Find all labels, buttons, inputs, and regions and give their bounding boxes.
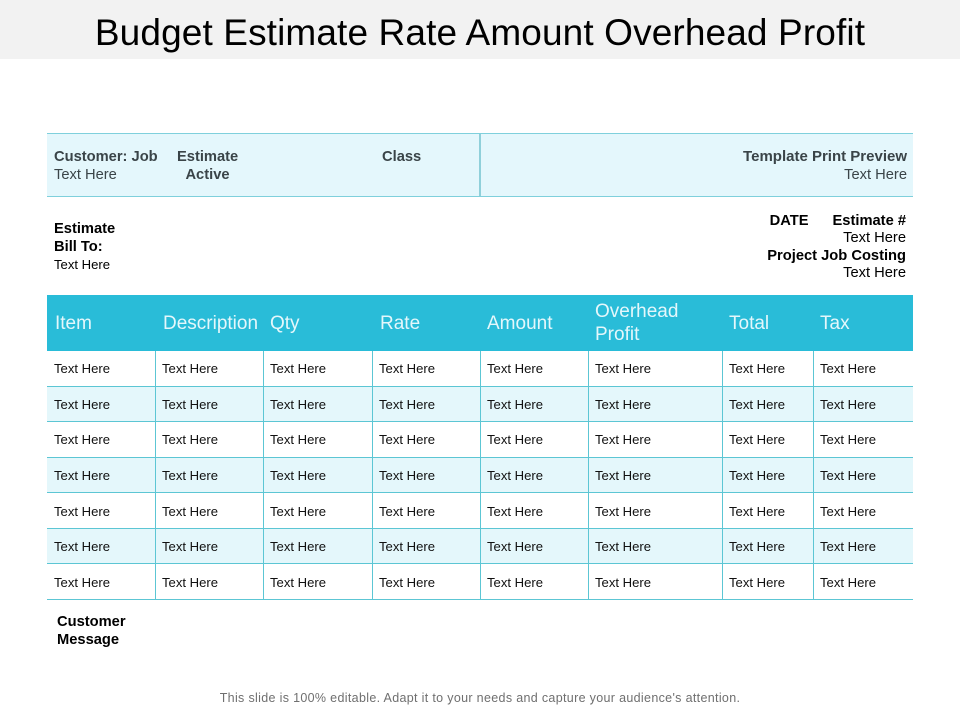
header: amount: Amount: [487, 313, 552, 334]
row 7: Text Here: [54, 575, 110, 590]
row 4: Text Here: [162, 468, 218, 483]
row 6: Text Here: [487, 539, 543, 554]
row 1: Text Here: [595, 361, 651, 376]
row 2: [47, 387, 913, 422]
title: Budget Estimate Rate Amount Overhead Profit: [95, 12, 865, 53]
row 6: Text Here: [820, 539, 876, 554]
row 3: [47, 422, 913, 458]
estimate status: Estimate: [177, 149, 238, 165]
row 4: Text Here: [379, 468, 435, 483]
row 4: Text Here: [729, 468, 785, 483]
row 5: Text Here: [729, 504, 785, 519]
row 3: Text Here: [729, 432, 785, 447]
customer job: Text Here: [54, 167, 117, 183]
row 6: Text Here: [729, 539, 785, 554]
row 7: Text Here: [595, 575, 651, 590]
row 6: [47, 529, 913, 564]
row 3: Text Here: [820, 432, 876, 447]
row 4: Text Here: [54, 468, 110, 483]
template print preview: [743, 148, 907, 183]
table: estimate line items: [47, 295, 913, 600]
row 1: Text Here: [379, 361, 435, 376]
row 4: Text Here: [820, 468, 876, 483]
header: overhead profit: Overhead: [595, 301, 678, 322]
row 1: Text Here: [54, 361, 110, 376]
estimate bill to: [54, 221, 115, 272]
footer note: This slide is 100% editable. Adapt it to your needs and capture your audience's attention.: [220, 691, 740, 705]
row 2: Text Here: [270, 397, 326, 412]
row 5: Text Here: [270, 504, 326, 519]
estimate bill to: Bill To:: [54, 239, 103, 255]
row 7: Text Here: [729, 575, 785, 590]
header: qty: Qty: [270, 313, 300, 334]
row 1: Text Here: [487, 361, 543, 376]
row 2: Text Here: [54, 397, 110, 412]
row 6: Text Here: [379, 539, 435, 554]
date and estimate number block: Text Here: [843, 265, 906, 281]
date and estimate number block: Text Here: [843, 230, 906, 246]
row 4: Text Here: [595, 468, 651, 483]
row 2: Text Here: [487, 397, 543, 412]
estimate bill to: Estimate: [54, 221, 115, 237]
row 5: [47, 493, 913, 529]
row 5: Text Here: [162, 504, 218, 519]
row 7: [47, 564, 913, 600]
row 5: Text Here: [379, 504, 435, 519]
class label: Class: [382, 149, 421, 165]
estimate bill to: Text Here: [54, 257, 110, 272]
header: total: Total: [729, 313, 769, 334]
estimate status: [177, 149, 238, 183]
row 6: Text Here: [54, 539, 110, 554]
customer message: [57, 614, 126, 648]
row 5: Text Here: [595, 504, 651, 519]
title band: [0, 0, 960, 59]
row 1: Text Here: [162, 361, 218, 376]
customer message: Message: [57, 632, 119, 648]
date and estimate number block: [767, 212, 906, 281]
table header: [47, 295, 913, 351]
row 7: Text Here: [487, 575, 543, 590]
row 1: Text Here: [820, 361, 876, 376]
row 4: [47, 458, 913, 493]
row 3: Text Here: [162, 432, 218, 447]
row 2: Text Here: [379, 397, 435, 412]
header: tax: Tax: [820, 313, 850, 334]
row 7: Text Here: [379, 575, 435, 590]
header: overhead profit: Profit: [595, 324, 639, 345]
row 3: Text Here: [487, 432, 543, 447]
row 7: Text Here: [820, 575, 876, 590]
row 4: Text Here: [270, 468, 326, 483]
customer job: Customer: Job: [54, 149, 158, 165]
row 3: Text Here: [595, 432, 651, 447]
divider: [479, 134, 480, 196]
row 5: Text Here: [487, 504, 543, 519]
customer message: Customer: [57, 614, 126, 630]
header: overhead profit: [595, 301, 678, 345]
estimate status: Active: [185, 167, 230, 183]
row 3: Text Here: [270, 432, 326, 447]
row 2: Text Here: [162, 397, 218, 412]
row 5: Text Here: [820, 504, 876, 519]
customer job: [54, 149, 158, 183]
header: item: Item: [55, 313, 92, 334]
row 2: Text Here: [729, 397, 785, 412]
row 6: Text Here: [595, 539, 651, 554]
row 1: [47, 351, 913, 387]
row 1: Text Here: [729, 361, 785, 376]
row 7: Text Here: [270, 575, 326, 590]
row 3: Text Here: [379, 432, 435, 447]
date and estimate number block: Project Job Costing: [767, 248, 906, 264]
row 1: Text Here: [270, 361, 326, 376]
row 4: Text Here: [487, 468, 543, 483]
template print preview: Template Print Preview: [743, 148, 907, 165]
template print preview: Text Here: [844, 167, 907, 183]
row 7: Text Here: [162, 575, 218, 590]
row 5: Text Here: [54, 504, 110, 519]
row 2: Text Here: [595, 397, 651, 412]
date and estimate number block: DATE Estimate #: [770, 212, 906, 228]
header: description: Description: [163, 313, 258, 334]
header: rate: Rate: [380, 313, 420, 334]
row 6: Text Here: [270, 539, 326, 554]
row 6: Text Here: [162, 539, 218, 554]
row 2: Text Here: [820, 397, 876, 412]
row 3: Text Here: [54, 432, 110, 447]
panel: estimate summary band: [47, 133, 913, 197]
